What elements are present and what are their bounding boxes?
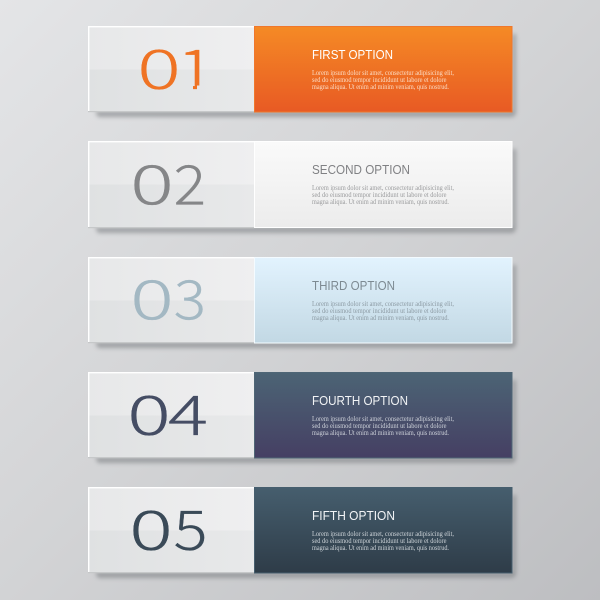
number 03 bbox=[130, 256, 206, 336]
number panel bbox=[88, 26, 254, 112]
number 04: 4 bbox=[168, 371, 208, 451]
number 01: 0 bbox=[137, 26, 181, 106]
heading: FIRST OPTION bbox=[312, 47, 393, 62]
body text bbox=[312, 416, 454, 437]
number 05: 0 bbox=[129, 487, 173, 567]
body text: magna aliqua. Ut enim ad minim veniam, quis nostrud. bbox=[312, 315, 449, 322]
heading: SECOND OPTION bbox=[312, 162, 410, 177]
body text: Lorem ipsum dolor sit amet, consectetur adipisicing elit, bbox=[312, 185, 454, 192]
body text: Lorem ipsum dolor sit amet, consectetur adipisicing elit, bbox=[312, 301, 454, 308]
body text: magna aliqua. Ut enim ad minim veniam, quis nostrud. bbox=[312, 545, 449, 552]
body text: sed do eiusmod tempor incididunt ut labore et dolore bbox=[312, 77, 446, 84]
body text: sed do eiusmod tempor incididunt ut labore et dolore bbox=[312, 538, 446, 545]
card shadow bbox=[95, 495, 516, 578]
number 03: 0 bbox=[130, 256, 174, 336]
body text bbox=[312, 531, 454, 552]
body text: Lorem ipsum dolor sit amet, consectetur adipisicing elit, bbox=[312, 70, 454, 77]
number 02: 2 bbox=[174, 141, 206, 221]
body text bbox=[312, 301, 454, 322]
number 05: 5 bbox=[174, 487, 207, 567]
body text: magna aliqua. Ut enim ad minim veniam, quis nostrud. bbox=[312, 430, 449, 437]
white content panel bbox=[254, 142, 512, 228]
option 4 card bbox=[88, 371, 516, 463]
body text: Lorem ipsum dolor sit amet, consectetur adipisicing elit, bbox=[312, 531, 454, 538]
option 5 card bbox=[88, 487, 516, 578]
dark slate content panel bbox=[254, 488, 512, 573]
card shadow bbox=[95, 380, 516, 463]
orange content panel bbox=[254, 26, 512, 112]
option 2 card bbox=[88, 141, 516, 233]
number 02 bbox=[130, 141, 206, 221]
body text: sed do eiusmod tempor incididunt ut labore et dolore bbox=[312, 192, 446, 199]
card shadow bbox=[95, 34, 516, 117]
navy content panel bbox=[254, 372, 512, 458]
card shadow bbox=[95, 149, 516, 233]
number panel bbox=[88, 372, 254, 458]
number 01 bbox=[141, 49, 200, 90]
light blue content panel bbox=[254, 258, 512, 343]
heading: THIRD OPTION bbox=[312, 278, 395, 293]
number 03: 3 bbox=[174, 256, 206, 336]
body text: sed do eiusmod tempor incididunt ut labore et dolore bbox=[312, 308, 446, 315]
option 3 card bbox=[88, 256, 516, 348]
body text bbox=[312, 185, 454, 206]
body text bbox=[312, 70, 454, 91]
number 04 bbox=[127, 371, 208, 452]
number 01: 1 bbox=[176, 26, 215, 105]
number 02: 0 bbox=[130, 141, 174, 221]
card shadow bbox=[95, 265, 516, 348]
number panel bbox=[88, 257, 254, 343]
number panel bbox=[88, 141, 254, 228]
number 05 bbox=[129, 487, 207, 567]
body text: Lorem ipsum dolor sit amet, consectetur adipisicing elit, bbox=[312, 416, 454, 423]
body text: sed do eiusmod tempor incididunt ut labore et dolore bbox=[312, 423, 446, 430]
number 04: 0 bbox=[127, 372, 171, 452]
number panel bbox=[88, 487, 254, 573]
heading: FIFTH OPTION bbox=[312, 508, 395, 523]
body text: magna aliqua. Ut enim ad minim veniam, quis nostrud. bbox=[312, 199, 449, 206]
body text: magna aliqua. Ut enim ad minim veniam, quis nostrud. bbox=[312, 84, 449, 91]
heading: FOURTH OPTION bbox=[312, 393, 408, 408]
option 1 card bbox=[88, 26, 516, 117]
